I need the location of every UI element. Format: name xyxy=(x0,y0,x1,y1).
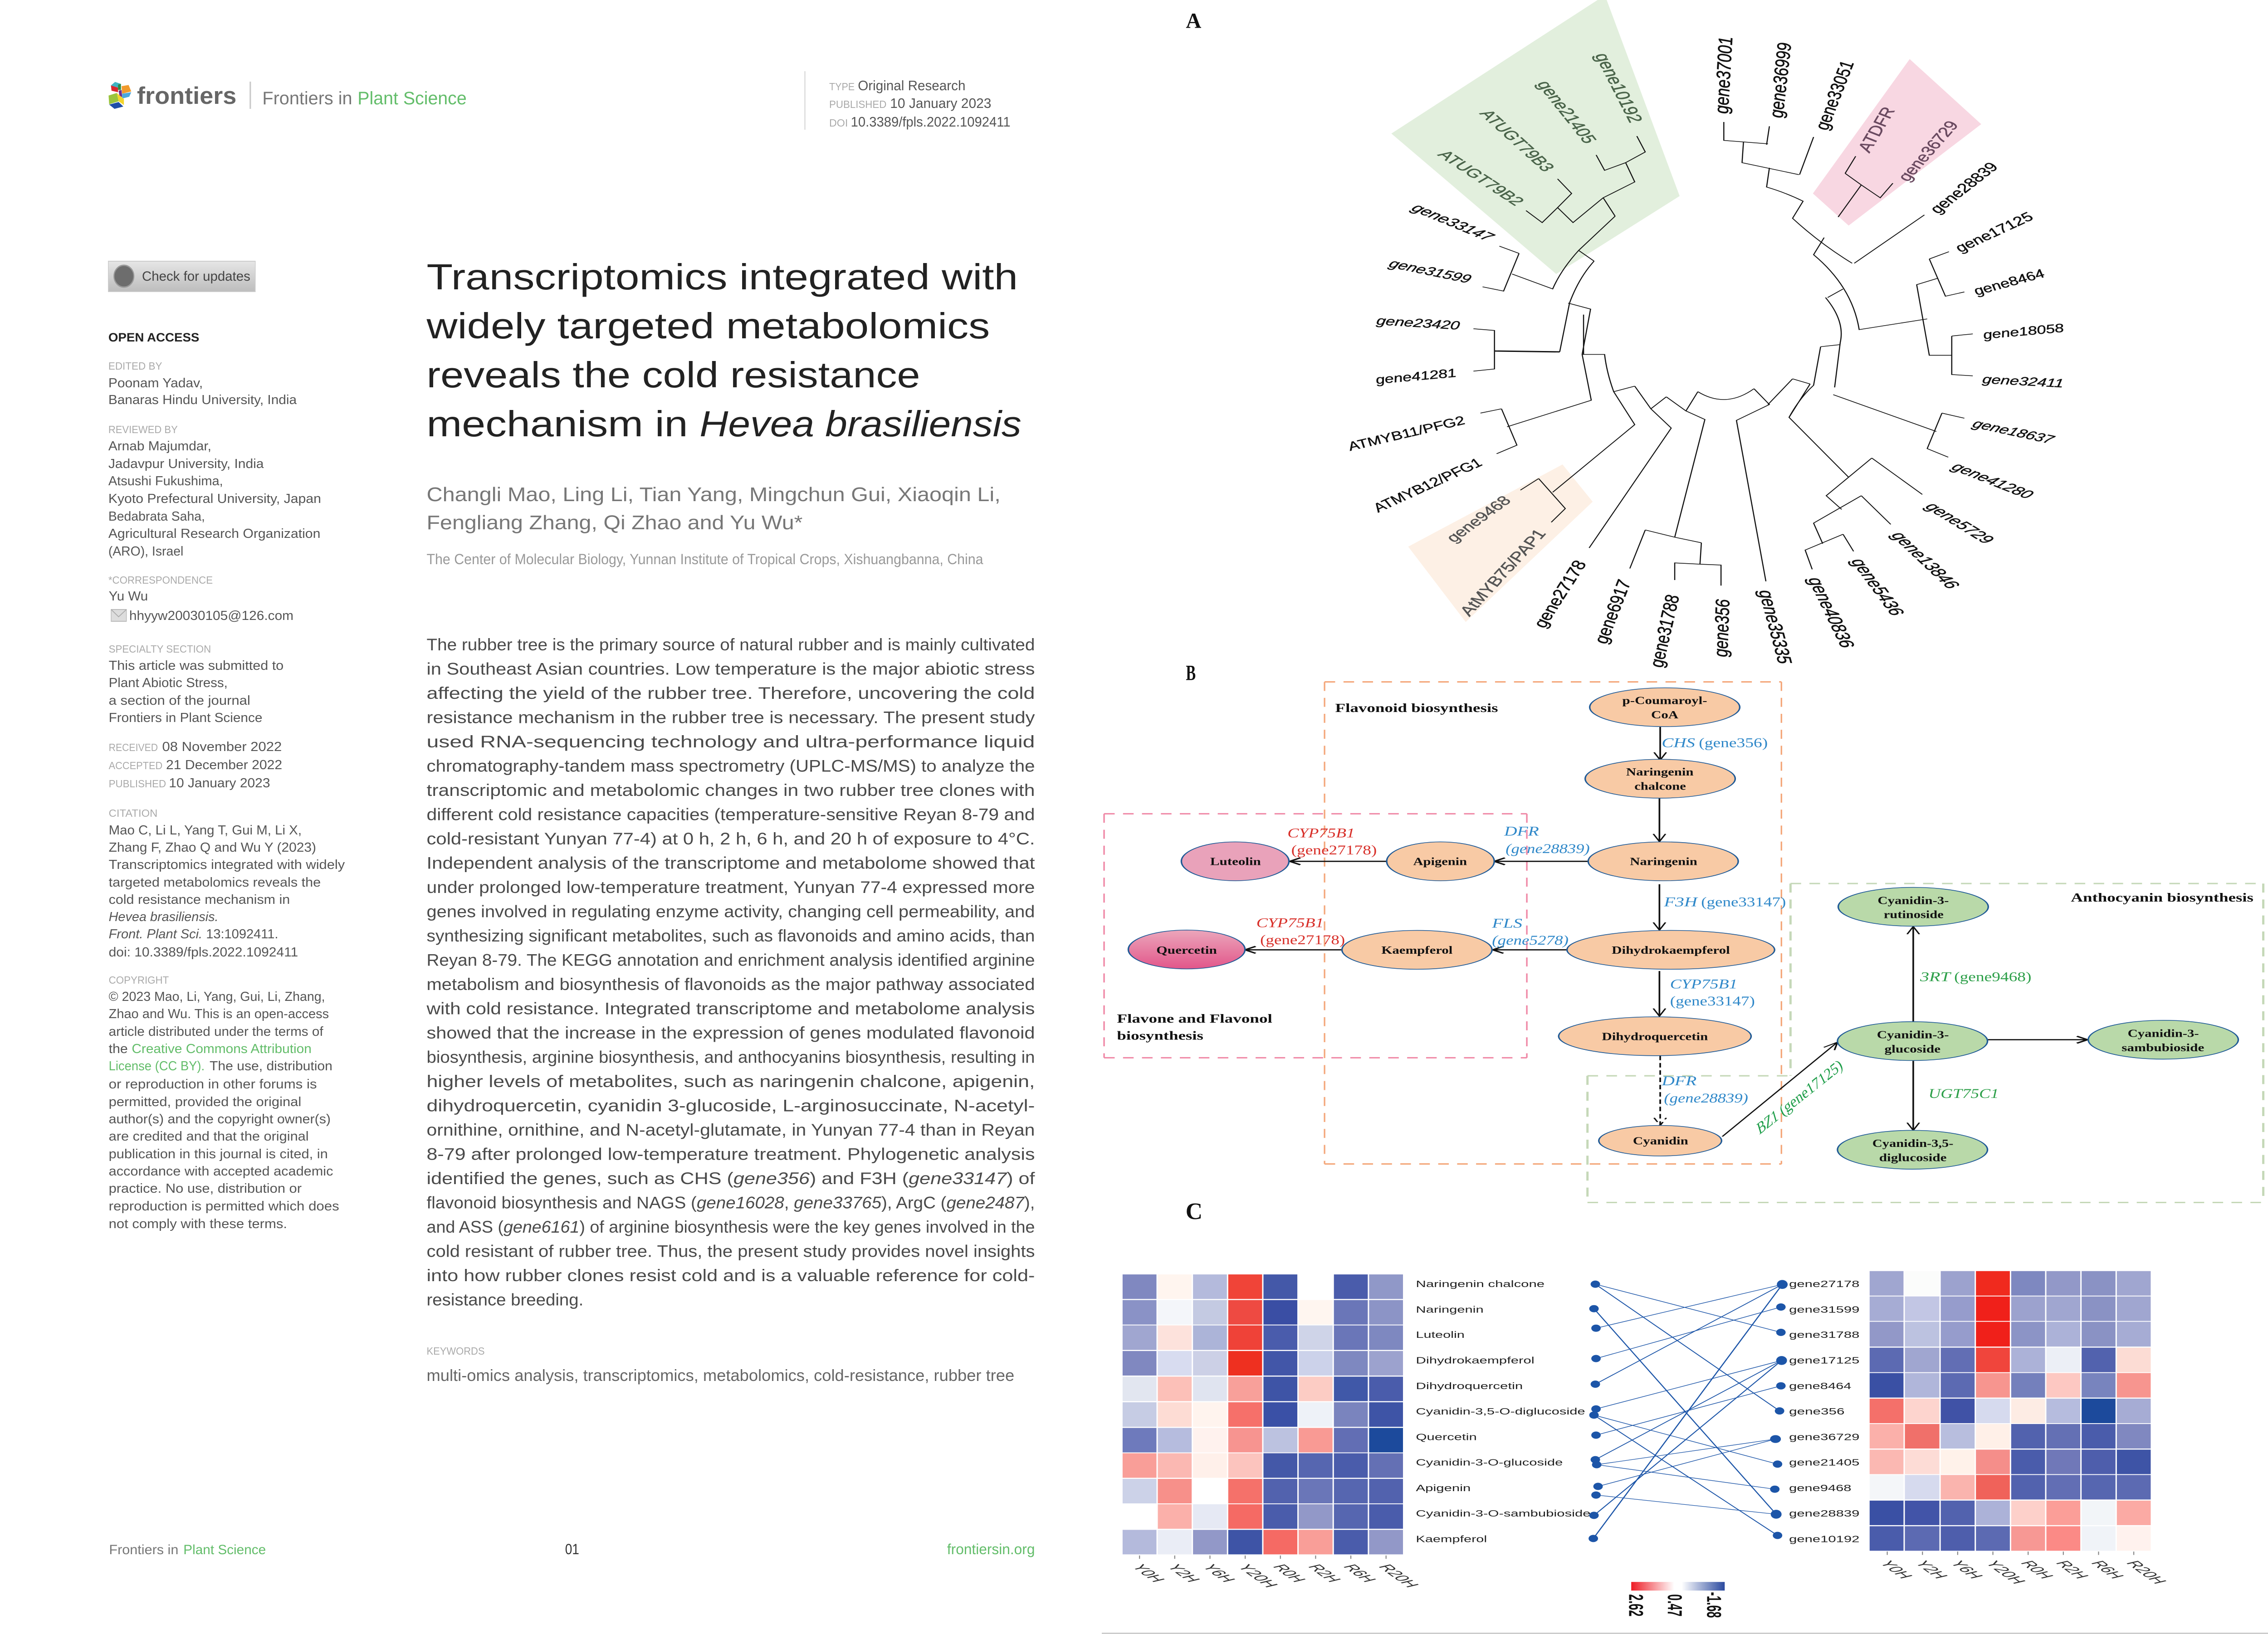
highlight: peach MYB75 clade xyxy=(1408,464,1593,622)
keywords xyxy=(427,1346,1014,1385)
abstract text: used RNA-sequencing technology and ultra-performance liquid xyxy=(427,733,1035,751)
metabolite labels: Naringenin xyxy=(1416,1304,1484,1315)
gene labels: gene9468 xyxy=(1789,1483,1851,1493)
sidebar: article information: or reproduction in other forums is xyxy=(109,1076,317,1092)
colour scale legend: 2.62 xyxy=(1624,1594,1647,1616)
sidebar: article information: cold resistance mechanism in xyxy=(109,892,290,907)
abstract text: The rubber tree is the primary source of natural rubber and is mainly cultivated xyxy=(427,636,1035,654)
panel B: flavonoid pathway diagram: B xyxy=(1186,661,1196,685)
sidebar: article information: doi: 10.3389/fpls.2022.1092411 xyxy=(109,944,298,960)
gene labels: gene33147 xyxy=(1408,201,1498,244)
left heatmap: metabolites xyxy=(1123,1274,1403,1554)
sidebar: article information: Kyoto Prefectural University, Japan xyxy=(108,491,321,506)
sidebar: article information: article distributed under the terms of xyxy=(109,1024,323,1039)
sidebar: article information: Plant Abiotic Stress, xyxy=(109,675,228,690)
node: Apigenin xyxy=(1387,842,1494,881)
sidebar: article information: hhyyw20030105@126.com xyxy=(129,608,293,623)
node: Cyanidin-3-glucoside: Cyanidin-3- xyxy=(1877,1029,1949,1041)
authors and affiliation: Changli Mao, Ling Li, Tian Yang, Mingchun Gui, Xiaoqin Li, xyxy=(427,483,1001,506)
sidebar: article information: Front. Plant Sci. 13:1092411. xyxy=(109,926,278,941)
panel letter A: A xyxy=(1186,9,1201,33)
footer: 01 xyxy=(565,1541,579,1558)
node: Dihydrokaempferol: Dihydrokaempferol xyxy=(1612,944,1730,956)
icon: update badge xyxy=(114,265,134,287)
abstract text: in Southeast Asian countries. Low temperature is the major abiotic stress xyxy=(427,660,1035,678)
region: flavonoid biosynthesis box xyxy=(1325,682,1781,1164)
journal name accent: Plant Science xyxy=(357,88,467,108)
gene labels: gene36729 xyxy=(1789,1432,1859,1442)
gene labels xyxy=(1344,36,2065,668)
node: Cyanidin-3-rutinoside xyxy=(1838,888,1988,926)
abstract text: flavonoid biosynthesis and NAGS ( gene16028 , gene33765 ), ArgC ( gene2487 ), xyxy=(427,1194,1035,1212)
icon: envelope xyxy=(111,610,127,621)
footer: Frontiers in xyxy=(109,1542,178,1557)
sidebar: article information: RECEIVED xyxy=(109,742,158,754)
gene labels: gene41280 xyxy=(1948,460,2037,502)
abstract text: affecting the yield of the rubber tree. Therefore, uncovering the cold xyxy=(427,684,1035,703)
sidebar: article information: Poonam Yadav, xyxy=(108,375,203,390)
button: check for updates xyxy=(108,261,255,292)
enzyme labels: red xyxy=(1256,826,1377,947)
gene labels: gene28839 xyxy=(1925,161,2003,216)
node: Cyanidin-3-sambubioside: sambubioside xyxy=(2121,1041,2204,1054)
gene labels: gene35335 xyxy=(1755,589,1796,665)
sidebar: article information: permitted, provided the original xyxy=(109,1094,301,1109)
heading: flavonoid biosynthesis: Flavonoid biosynthesis xyxy=(1335,701,1498,715)
metabolite labels: Naringenin chalcone xyxy=(1416,1278,1545,1289)
sidebar: article information: PUBLISHED xyxy=(109,778,166,790)
sidebar: article information: This article was submitted to xyxy=(109,658,284,673)
gene labels: gene31599 xyxy=(1387,257,1474,286)
node: Naringenin chalcone: chalcone xyxy=(1634,780,1686,792)
article metadata: PUBLISHED xyxy=(829,99,886,111)
sidebar: article information: author(s) and the copyright owner(s) xyxy=(109,1111,331,1127)
left heatmap column labels xyxy=(1128,1556,1423,1589)
node: Cyanidin xyxy=(1599,1126,1721,1156)
gene labels xyxy=(1789,1278,1859,1544)
enzyme labels: red: CYP75B1 xyxy=(1287,826,1355,840)
right heatmap: genes xyxy=(1870,1271,2151,1551)
gene labels: gene5436 xyxy=(1847,556,1908,618)
gene labels: gene27178 xyxy=(1529,559,1591,629)
right heatmap column labels: Y0H xyxy=(1876,1559,1917,1580)
enzyme labels: blue: (gene28839) xyxy=(1505,841,1590,856)
abstract text: higher levels of metabolites, such as naringenin chalcone, apigenin, xyxy=(427,1073,1035,1091)
right heatmap column labels xyxy=(1876,1551,2171,1585)
sidebar: article information: Arnab Majumdar, xyxy=(108,438,211,454)
heading: flavone and flavonol biosynthesis: biosynthesis xyxy=(1117,1029,1203,1043)
gene labels: gene18058 xyxy=(1981,321,2065,341)
node: Cyanidin-3-glucoside xyxy=(1838,1022,1988,1061)
enzyme labels: green: 3RT xyxy=(1920,969,1952,984)
enzyme label: BZ1 along diagonal arrow: BZ1 (gene17125) xyxy=(1754,1056,1845,1138)
enzyme labels: green: (gene9468) xyxy=(1954,969,2031,984)
metabolite labels: Cyanidin-3-O-glucoside xyxy=(1416,1457,1563,1468)
node: Cyanidin-3-glucoside: glucoside xyxy=(1884,1043,1941,1055)
node: p-Coumaroyl-CoA: CoA xyxy=(1651,708,1678,721)
node: Cyanidin-3-rutinoside: rutinoside xyxy=(1884,908,1944,921)
abstract text: Independent analysis of the transcriptome and metabolome showed that xyxy=(427,854,1035,873)
abstract text: transcriptomic and metabolomic changes in two rubber tree clones with xyxy=(427,781,1035,800)
node: Luteolin: Luteolin xyxy=(1210,855,1261,868)
sidebar: article information: COPYRIGHT xyxy=(109,975,169,986)
enzyme labels: blue: CHS xyxy=(1662,736,1695,750)
node: Naringenin chalcone xyxy=(1585,759,1735,798)
abstract text: metabolism and biosynthesis of flavonoids as the major pathway associated xyxy=(427,976,1035,994)
correlation network lines xyxy=(1593,1284,1782,1538)
enzyme labels: red: (gene27178) xyxy=(1291,843,1377,857)
sidebar: article information: Hevea brasiliensis. xyxy=(109,909,219,924)
abstract text: chromatography-tandem mass spectrometry (UPLC-MS/MS) to analyze the xyxy=(427,757,1035,776)
abstract text: cold-resistant Yunyan 77-4) at 0 h, 2 h, 6 h, and 20 h of exposure to 4°C. xyxy=(427,830,1035,849)
footer: frontiersin.org xyxy=(947,1541,1035,1558)
arrows xyxy=(1245,727,2087,1136)
gene labels: gene36729 xyxy=(1893,119,1963,183)
article metadata: DOI xyxy=(829,117,848,129)
colour scale legend xyxy=(1624,1582,1725,1618)
abstract text: different cold resistance capacities (temperature-sensitive Reyan 8-79 and xyxy=(427,805,1035,824)
left heatmap column labels: Y6H xyxy=(1198,1563,1240,1584)
sidebar: article information: Bedabrata Saha, xyxy=(108,508,205,524)
sidebar: article information: © 2023 Mao, Li, Yang, Gui, Li, Zhang, xyxy=(109,989,325,1004)
gene labels: gene28839 xyxy=(1789,1508,1859,1518)
gene labels: gene31599 xyxy=(1789,1304,1859,1315)
gene labels: gene18637 xyxy=(1970,417,2058,447)
node: Naringenin xyxy=(1588,842,1738,881)
colour scale legend: 0.47 xyxy=(1663,1594,1686,1616)
sidebar: article information: 21 December 2022 xyxy=(166,757,282,772)
sidebar: article information: REVIEWED BY xyxy=(108,424,178,436)
metabolite labels: Cyanidin-3-O-sambubioside xyxy=(1416,1508,1591,1518)
node: Kaempferol: Kaempferol xyxy=(1381,944,1452,956)
gene labels: gene356 xyxy=(1710,599,1734,657)
authors and affiliation xyxy=(427,483,1001,568)
sidebar: article information: Frontiers in Plant Science xyxy=(109,710,262,725)
gene labels: AtMYB75/PAP1 xyxy=(1454,527,1551,619)
metabolite labels xyxy=(1416,1278,1591,1544)
article metadata: 10 January 2023 xyxy=(890,95,991,111)
gene labels: gene10192 xyxy=(1591,52,1647,124)
article metadata: TYPE xyxy=(829,81,855,93)
enzyme labels: green: UGT75C1 xyxy=(1928,1086,1999,1101)
enzyme labels: blue: (gene28839) xyxy=(1664,1091,1748,1106)
node: p-Coumaroyl-CoA xyxy=(1590,688,1740,727)
sidebar: article information: Zhang F, Zhao Q and Wu Y (2023) xyxy=(109,839,316,855)
article title: mechanism in xyxy=(427,404,688,444)
gene labels: ATUGT79B2 xyxy=(1434,148,1528,208)
sidebar: article information: are credited and that the original xyxy=(109,1128,309,1144)
gene labels: ATDFR xyxy=(1853,106,1900,155)
logo wordmark: frontiers xyxy=(137,83,236,109)
node: Cyanidin-3,5-diglucoside: diglucoside xyxy=(1879,1151,1946,1164)
sidebar: article information: OPEN ACCESS xyxy=(108,331,199,345)
tree branches xyxy=(1473,122,1973,585)
heading: flavone and flavonol biosynthesis: Flavone and Flavonol xyxy=(1117,1012,1272,1026)
sidebar: article information: accordance with accepted academic xyxy=(109,1163,333,1179)
network nodes xyxy=(1589,1280,1788,1542)
abstract text: identified the genes, such as CHS ( gene356 ) and F3H ( gene33147 ) of xyxy=(427,1170,1035,1188)
sidebar: article information: practice. No use, distribution or xyxy=(109,1180,302,1196)
sidebar: article information: publication in this journal is cited, in xyxy=(109,1146,328,1161)
sidebar: article information: 10 January 2023 xyxy=(169,775,270,790)
node: Cyanidin-3-sambubioside xyxy=(2088,1020,2238,1059)
keywords: multi-omics analysis, transcriptomics, metabolomics, cold-resistance, rubber tree xyxy=(427,1366,1014,1385)
panel A: phylogenetic tree xyxy=(1186,0,2065,668)
gene labels: gene40836 xyxy=(1804,576,1858,649)
keywords: KEYWORDS xyxy=(427,1346,485,1357)
authors and affiliation: Fengliang Zhang, Qi Zhao and Yu Wu* xyxy=(427,512,802,534)
left heatmap column labels: Y20H xyxy=(1233,1563,1282,1589)
left heatmap column labels: R0H xyxy=(1269,1563,1310,1584)
gene labels: gene31788 xyxy=(1789,1330,1859,1340)
panel: article front page xyxy=(108,71,1035,1558)
gene labels: gene41281 xyxy=(1374,366,1458,387)
sidebar: article information: not comply with these terms. xyxy=(109,1216,287,1231)
gene labels: gene8464 xyxy=(1970,267,2048,298)
metabolite labels: Cyanidin-3,5-O-diglucoside xyxy=(1416,1406,1585,1416)
right heatmap column labels: R6H xyxy=(2087,1559,2128,1580)
left heatmap column labels: Y0H xyxy=(1128,1563,1169,1584)
article title: Transcriptomics integrated with xyxy=(427,257,1018,298)
sidebar: article information: 08 November 2022 xyxy=(162,739,282,754)
gene labels: gene31788 xyxy=(1646,594,1684,668)
sidebar: article information: (ARO), Israel xyxy=(108,543,183,559)
metabolite labels: Apigenin xyxy=(1416,1483,1471,1493)
abstract text: under prolonged low-temperature treatment, Yunyan 77-4 expressed more xyxy=(427,878,1035,897)
node: Quercetin: Quercetin xyxy=(1156,944,1217,956)
journal name: Frontiers in xyxy=(262,88,352,108)
enzyme labels: blue: (gene5278) xyxy=(1492,933,1569,947)
enzyme labels: blue: FLS xyxy=(1491,916,1522,931)
region: anthocyanin box xyxy=(1588,883,2263,1203)
abstract text: into how rubber clones resist cold and is a valuable reference for cold- xyxy=(427,1267,1035,1285)
sidebar: article information: Banaras Hindu University, India xyxy=(108,392,297,407)
sidebar: article information: Atsushi Fukushima, xyxy=(108,473,223,488)
sidebar: article information: The use, distribution xyxy=(210,1058,332,1073)
gene labels: gene9468 xyxy=(1441,494,1515,545)
node: Cyanidin: Cyanidin xyxy=(1633,1135,1688,1147)
sidebar: article information: targeted metabolomics reveals the xyxy=(109,874,321,890)
abstract text: ornithine, ornithine, and N-acetyl-glutamate, in Yunyan 77-4 than in Reyan xyxy=(427,1121,1035,1140)
node: Dihydroquercetin: Dihydroquercetin xyxy=(1602,1030,1708,1043)
abstract text: 8-79 after prolonged low-temperature treatment. Phylogenetic analysis xyxy=(427,1145,1035,1164)
gene labels: gene356 xyxy=(1789,1406,1845,1416)
abstract text: with cold resistance. Integrated transcriptome and metabolome analysis xyxy=(426,1000,1035,1018)
enzyme labels: red: CYP75B1 xyxy=(1256,916,1324,930)
abstract text: biosynthesis, arginine biosynthesis, and anthocyanins biosynthesis, resulting in xyxy=(427,1048,1035,1067)
panel C: correlation heatmaps xyxy=(1123,1198,2171,1618)
left heatmap column labels: R2H xyxy=(1304,1563,1345,1584)
panel C: correlation heatmaps: C xyxy=(1186,1198,1202,1224)
node: p-Coumaroyl-CoA: p-Coumaroyl- xyxy=(1623,694,1707,707)
right heatmap column labels: R20H xyxy=(2122,1559,2171,1585)
right heatmap column labels: Y2H xyxy=(1911,1559,1952,1580)
colour scale legend: -1.68 xyxy=(1702,1592,1725,1618)
abstract text: cold resistant of rubber tree. Thus, the present study provides novel insights xyxy=(427,1242,1035,1261)
icon: frontiers cube logo xyxy=(108,82,131,109)
gene labels: ATMYB12/PFG1 xyxy=(1368,456,1486,515)
footer xyxy=(109,1541,1035,1558)
node: Cyanidin-3,5-diglucoside xyxy=(1838,1130,1988,1169)
abstract text: resistance mechanism in the rubber tree is necessary. The present study xyxy=(427,708,1035,727)
gene labels: gene17125 xyxy=(1789,1355,1859,1366)
gene labels: gene10192 xyxy=(1789,1534,1859,1544)
sidebar: article information: Mao C, Li L, Yang T, Gui M, Li X, xyxy=(109,822,302,838)
metabolite labels: Kaempferol xyxy=(1416,1534,1487,1544)
gene labels: gene21405 xyxy=(1789,1457,1859,1468)
gene labels: gene17125 xyxy=(1950,210,2038,255)
heading: flavone and flavonol biosynthesis xyxy=(1117,1012,1272,1043)
metabolite labels: Dihydroquercetin xyxy=(1416,1381,1523,1391)
abstract text: Reyan 8-79. The KEGG annotation and enrichment analysis identified arginine xyxy=(427,951,1035,970)
gene labels: gene37001 xyxy=(1711,36,1737,114)
gene labels: gene33051 xyxy=(1811,60,1858,131)
panel B: flavonoid pathway diagram xyxy=(1104,661,2263,1203)
article title: widely targeted metabolomics xyxy=(426,306,990,346)
node: Dihydroquercetin xyxy=(1559,1017,1751,1056)
sidebar: article information xyxy=(108,331,345,1231)
sidebar: article information: reproduction is permitted which does xyxy=(109,1198,339,1214)
gene labels: gene13846 xyxy=(1887,529,1964,591)
gene labels: gene27178 xyxy=(1789,1278,1859,1289)
sidebar: article information: Agricultural Research Organization xyxy=(108,526,320,541)
article metadata: Original Research xyxy=(858,78,965,93)
right heatmap column labels: R0H xyxy=(2016,1559,2058,1580)
node: Dihydrokaempferol xyxy=(1567,931,1774,969)
sidebar: article information: ACCEPTED xyxy=(109,760,162,772)
gene labels: gene8464 xyxy=(1789,1381,1851,1391)
sidebar: article information: EDITED BY xyxy=(108,361,162,372)
left heatmap column labels: R20H xyxy=(1374,1563,1423,1589)
article metadata: 10.3389/fpls.2022.1092411 xyxy=(851,114,1011,130)
gene labels: ATMYB11/PFG2 xyxy=(1344,414,1468,454)
left heatmap column labels: R6H xyxy=(1339,1563,1381,1584)
enzyme labels: blue: F3H xyxy=(1664,895,1698,909)
enzyme labels: blue xyxy=(1491,736,1786,1106)
enzyme labels: blue: (gene33147) xyxy=(1701,895,1786,909)
header: frontiers logo and journal xyxy=(108,82,467,109)
highlight: green UGT79B clade xyxy=(1391,0,1680,274)
node: Cyanidin-3,5-diglucoside: Cyanidin-3,5- xyxy=(1872,1137,1953,1149)
sidebar: article information: Transcriptomics integrated with widely xyxy=(109,857,345,872)
sidebar: article information: a section of the journal xyxy=(109,693,250,708)
enzyme labels: green xyxy=(1920,969,2031,1101)
sidebar: article information: SPECIALTY SECTION xyxy=(109,644,211,655)
gene labels: gene6917 xyxy=(1590,578,1636,645)
gene labels: ATUGT79B3 xyxy=(1476,107,1559,174)
gene labels: gene21405 xyxy=(1533,79,1601,146)
enzyme labels: blue: DFR xyxy=(1662,1073,1696,1088)
sidebar: article information: CITATION xyxy=(109,808,157,819)
node: Cyanidin-3-rutinoside: Cyanidin-3- xyxy=(1877,894,1949,907)
article title: Hevea brasiliensis xyxy=(699,404,1022,444)
sidebar: article information: Yu Wu xyxy=(109,588,148,604)
node: Apigenin: Apigenin xyxy=(1413,855,1467,868)
highlight: pink DFR clade xyxy=(1813,59,1981,225)
node: Cyanidin-3-sambubioside: Cyanidin-3- xyxy=(2128,1027,2199,1039)
region: flavone and flavonol box xyxy=(1104,814,1527,1058)
metabolite labels: Luteolin xyxy=(1416,1330,1465,1340)
abstract text: dihydroquercetin, cyanidin 3-glucoside, L-arginosuccinate, N-acetyl- xyxy=(427,1097,1035,1115)
node: Quercetin xyxy=(1128,930,1245,969)
sidebar: article information: the xyxy=(109,1041,128,1056)
abstract text: showed that the increase in the expression of genes modulated flavonoid xyxy=(427,1024,1035,1043)
enzyme labels: blue: (gene33147) xyxy=(1670,994,1755,1008)
abstract text: synthesizing significant metabolites, such as flavonoids and amino acids, than xyxy=(427,927,1035,946)
node: Kaempferol xyxy=(1342,931,1492,969)
sidebar: article information: License (CC BY). xyxy=(109,1058,205,1073)
sidebar: article information: Zhao and Wu. This is an open-access xyxy=(109,1006,329,1021)
right heatmap column labels: Y6H xyxy=(1946,1559,1988,1580)
sidebar: article information: *CORRESPONDENCE xyxy=(108,575,213,586)
footer: Plant Science xyxy=(183,1542,266,1557)
abstract text xyxy=(426,636,1035,1309)
right heatmap column labels: Y20H xyxy=(1981,1559,2030,1585)
gene labels: gene36999 xyxy=(1765,42,1796,118)
authors and affiliation: The Center of Molecular Biology, Yunnan Institute of Tropical Crops, Xishuangbanna, China xyxy=(427,551,983,568)
node: Naringenin: Naringenin xyxy=(1630,855,1697,868)
enzyme labels: blue: CYP75B1 xyxy=(1670,976,1737,991)
article title: reveals the cold resistance xyxy=(427,355,920,395)
left heatmap column labels: Y2H xyxy=(1163,1563,1205,1584)
enzyme labels: blue: (gene356) xyxy=(1699,736,1768,750)
metabolite labels: Quercetin xyxy=(1416,1432,1477,1442)
gene labels: gene23420 xyxy=(1375,314,1461,332)
article metadata xyxy=(804,71,1011,130)
abstract text: genes involved in regulating enzyme activity, changing cell permeability, and xyxy=(427,902,1035,921)
enzyme labels: red: (gene27178) xyxy=(1260,932,1345,947)
gene labels: gene32411 xyxy=(1981,372,2064,390)
abstract text: resistance breeding. xyxy=(427,1291,583,1309)
enzyme labels: blue: DFR xyxy=(1504,824,1539,839)
gene labels: gene5729 xyxy=(1921,500,1998,546)
button: check for updates: Check for updates xyxy=(142,268,250,284)
node: Naringenin chalcone: Naringenin xyxy=(1626,766,1694,778)
right heatmap column labels: R2H xyxy=(2052,1559,2093,1580)
node: Luteolin xyxy=(1181,842,1289,881)
sidebar: article information: Creative Commons Attribution xyxy=(132,1041,312,1056)
metabolite labels: Dihydrokaempferol xyxy=(1416,1355,1535,1366)
sidebar: article information: Jadavpur University, India xyxy=(108,456,264,471)
abstract text: and ASS ( gene6161 ) of arginine biosynthesis were the key genes involved in the xyxy=(427,1218,1035,1237)
article title xyxy=(426,257,1022,444)
